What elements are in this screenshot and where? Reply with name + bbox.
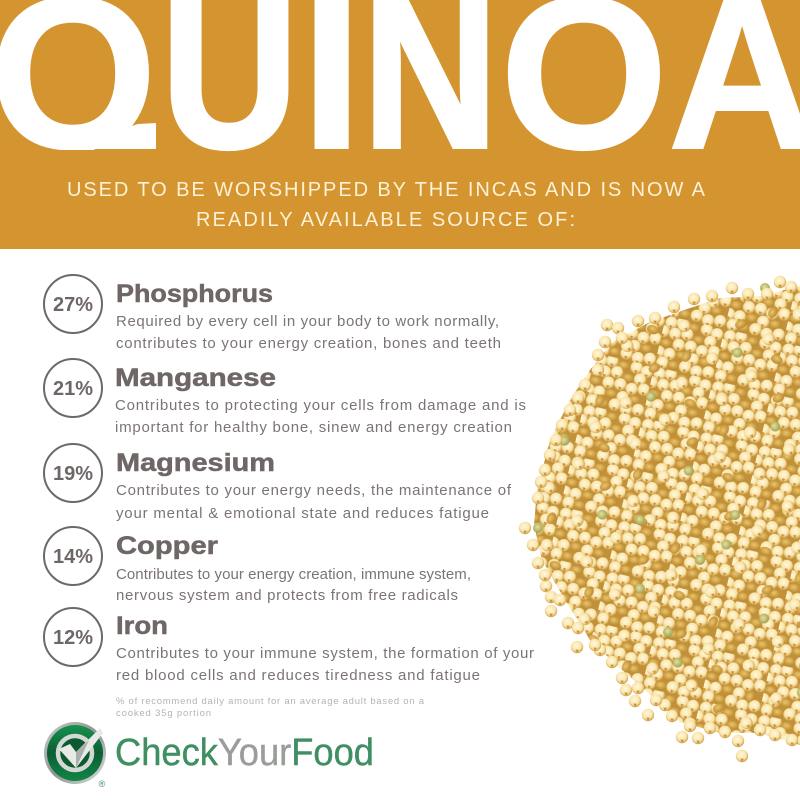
nutrient: phosphorus: contributes to your energy creation, bones and teeth xyxy=(116,335,501,352)
nutrient: copper: Copper xyxy=(116,532,218,560)
footnote xyxy=(116,696,425,719)
nutrient: iron xyxy=(44,608,534,684)
nutrient: iron: Iron xyxy=(116,612,168,640)
title xyxy=(0,0,800,152)
nutrient: iron: red blood cells and reduces tiredness and fatigue xyxy=(116,667,480,684)
nutrient: magnesium: 19% xyxy=(53,463,93,485)
nutrient: iron: 12% xyxy=(53,627,93,649)
nutrient: magnesium: Contributes to your energy needs, the maintenance of xyxy=(116,482,512,499)
nutrient: magnesium: your mental & emotional state and reduces fatigue xyxy=(116,505,489,522)
nutrient: magnesium xyxy=(44,444,512,522)
nutrient: copper: nervous system and protects from free radicals xyxy=(116,587,458,604)
nutrient: phosphorus xyxy=(44,275,501,352)
icon: check badge: ® xyxy=(99,779,106,789)
logo: CheckYourFood xyxy=(44,722,374,789)
icon: check badge xyxy=(44,722,106,789)
nutrient: manganese: Manganese xyxy=(115,364,276,392)
footnote: % of recommend daily amount for an average adult based on a xyxy=(116,696,425,707)
image: pile of quinoa seeds xyxy=(519,276,800,762)
subtitle xyxy=(67,179,706,231)
nutrient: manganese xyxy=(44,359,526,436)
footnote: cooked 35g portion xyxy=(116,708,211,719)
nutrient: phosphorus: Phosphorus xyxy=(116,280,273,308)
header banner xyxy=(0,0,800,249)
nutrient: iron: Contributes to your immune system, the formation of your xyxy=(116,645,534,662)
nutrient: magnesium: Magnesium xyxy=(116,449,275,477)
logo wordmark: CheckYourFood xyxy=(115,732,374,774)
nutrient: phosphorus: Required by every cell in your body to work normally, xyxy=(116,313,499,330)
subtitle: USED TO BE WORSHIPPED BY THE INCAS AND IS NOW A xyxy=(67,179,706,201)
nutrient: copper: Contributes to your energy creation, immune system, xyxy=(116,566,471,583)
nutrient: phosphorus: 27% xyxy=(53,294,93,316)
subtitle: READILY AVAILABLE SOURCE OF: xyxy=(196,209,575,231)
nutrient: manganese: 21% xyxy=(53,378,93,400)
nutrient: manganese: important for healthy bone, sinew and energy creation xyxy=(115,419,512,436)
nutrient: copper xyxy=(44,527,471,604)
nutrient: manganese: Contributes to protecting your cells from damage and is xyxy=(115,397,526,414)
nutrient: copper: 14% xyxy=(53,546,93,568)
